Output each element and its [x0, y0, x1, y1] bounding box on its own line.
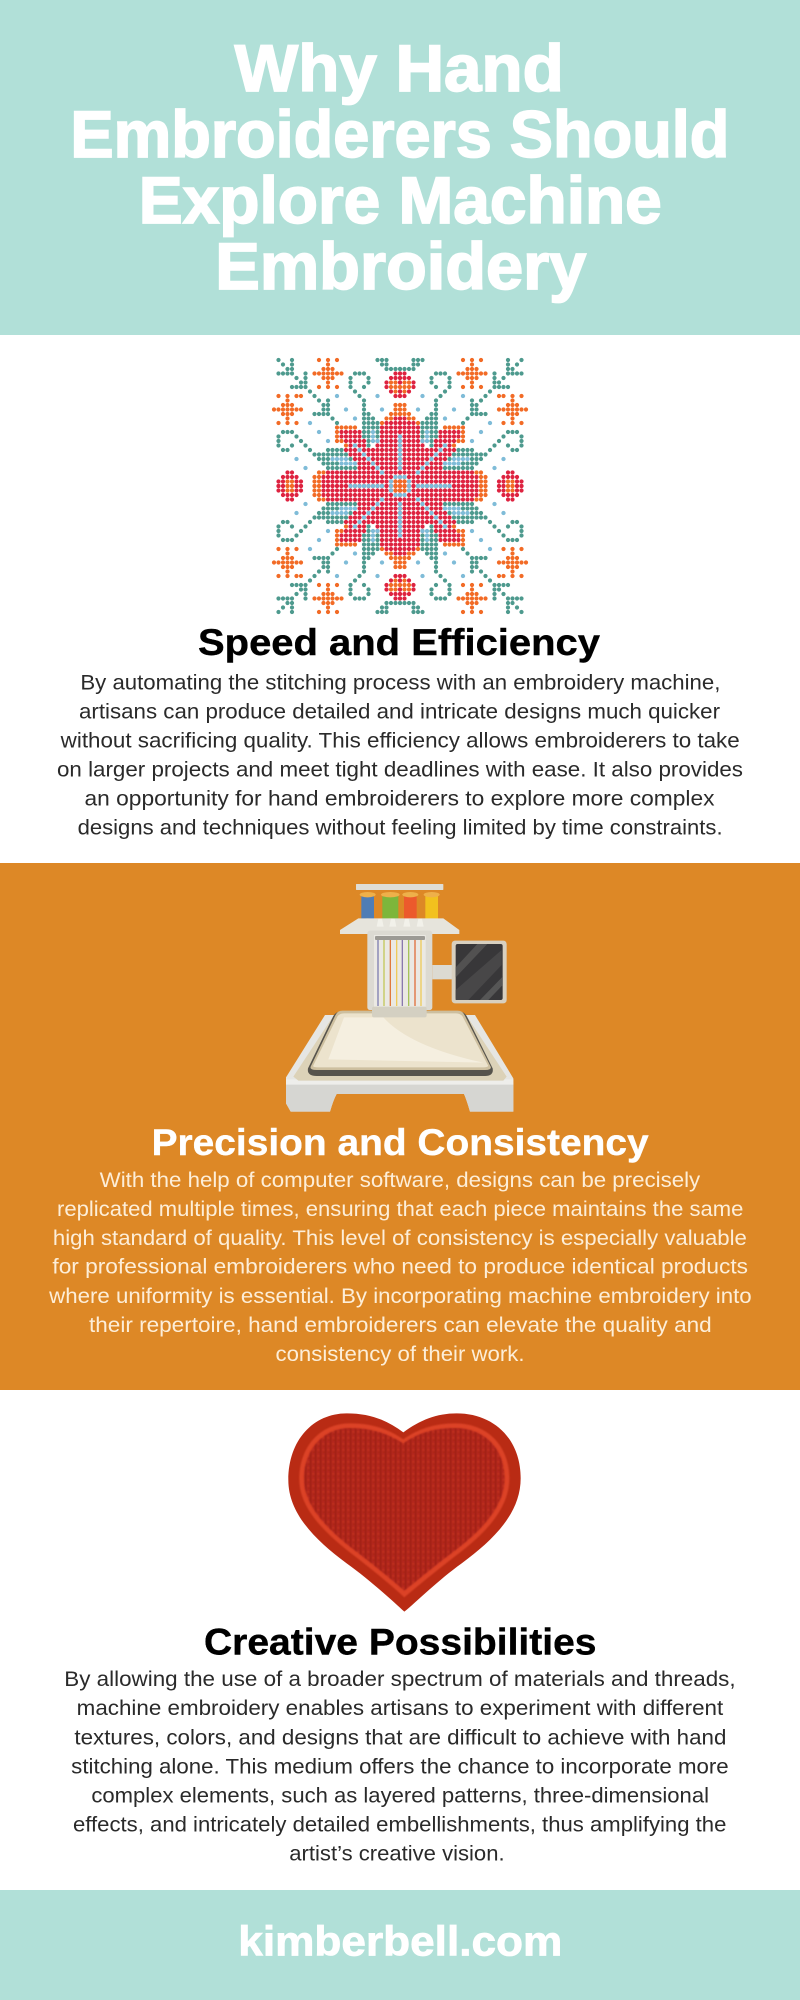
body text: speed and efficiency: designs and techniques without feeling limited by time constraints.	[78, 816, 723, 839]
body text: speed and efficiency	[57, 672, 743, 839]
heading: precision and consistency: Precision and Consistency	[152, 1122, 649, 1163]
title: Why Hand	[235, 31, 564, 105]
coloured threads	[378, 940, 421, 1006]
body text: speed and efficiency: an opportunity for hand embroiderers to explore more complex	[84, 787, 715, 810]
body text: creative possibilities: stitching alone. This medium offers the chance to incorporate more	[71, 1755, 729, 1778]
body text: creative possibilities: effects, and intricately detailed embellishments, thus amplifying the	[73, 1813, 726, 1836]
thread spools	[360, 892, 440, 923]
icon: cross-stitch flower mandala	[274, 360, 526, 612]
body text: precision and consistency	[48, 1169, 752, 1366]
footer url: kimberbell.com	[238, 1918, 562, 1965]
panel: header	[0, 0, 800, 335]
body text: creative possibilities: machine embroidery enables artisans to experiment with different	[77, 1697, 723, 1720]
panel: speed and efficiency	[0, 335, 800, 863]
body text: speed and efficiency: By automating the stitching process with an embroidery machine,	[80, 672, 720, 695]
machine base	[286, 1015, 513, 1112]
body text: precision and consistency: consistency of their work.	[276, 1343, 524, 1366]
title: Explore Machine	[139, 163, 662, 237]
embroidery hoop and fabric	[308, 1011, 493, 1076]
body text: precision and consistency: With the help of computer software, designs can be precisely	[100, 1169, 701, 1192]
body text: creative possibilities: complex elements, such as layered patterns, three-dimensional	[91, 1784, 709, 1807]
title: Embroidery	[215, 229, 587, 303]
control screen	[452, 941, 507, 1003]
body text: speed and efficiency: on larger projects and meet tight deadlines with ease. It also provides	[57, 758, 743, 781]
hoop clamp	[372, 1007, 427, 1017]
body text: speed and efficiency: artisans can produce detailed and intricate designs much quicker	[79, 701, 720, 724]
heading: creative possibilities: Creative Possibilities	[204, 1621, 596, 1662]
heading: speed and efficiency: Speed and Efficiency	[198, 622, 600, 663]
panel: creative possibilities	[0, 1390, 800, 1890]
body text: creative possibilities: By allowing the use of a broader spectrum of materials and threads,	[64, 1668, 736, 1691]
body text: creative possibilities: artist’s creative vision.	[289, 1842, 505, 1865]
body text: precision and consistency: replicated multiple times, ensuring that each piece maintains the same	[57, 1198, 743, 1221]
body text: precision and consistency: where uniformity is essential. By incorporating machine embroidery into	[48, 1285, 752, 1308]
thread cones	[377, 919, 424, 927]
icon: embroidered red heart patch	[288, 1413, 521, 1612]
icon: embroidery machine	[286, 884, 513, 1112]
spool shelf	[340, 918, 459, 934]
panel: footer	[0, 1890, 800, 2000]
panel: precision and consistency	[0, 863, 800, 1390]
body text: precision and consistency: for professional embroiderers who need to produce identical products	[52, 1256, 748, 1279]
title	[70, 31, 729, 303]
body text: precision and consistency: their repertoire, hand embroiderers can elevate the quality and	[89, 1314, 712, 1337]
machine column	[367, 931, 432, 1010]
body text: creative possibilities	[64, 1668, 736, 1865]
body text: speed and efficiency: without sacrificing quality. This efficiency allows embroiderers to take	[60, 730, 740, 753]
body text: precision and consistency: high standard of quality. This level of consistency is especially valuable	[53, 1227, 747, 1250]
body text: creative possibilities: textures, colors, and designs that are difficult to achieve with hand	[74, 1726, 726, 1749]
title: Embroiderers Should	[70, 97, 729, 171]
machine top bar	[356, 884, 443, 890]
screen arm	[432, 965, 452, 979]
